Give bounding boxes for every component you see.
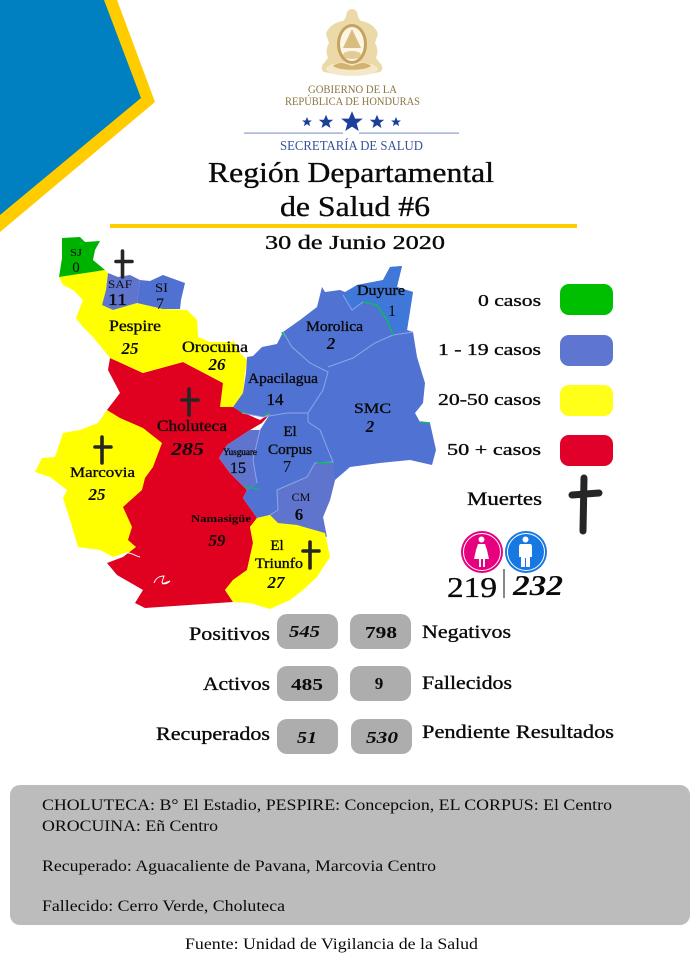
title [208, 158, 494, 223]
map labels: 1 [388, 303, 396, 320]
map labels: Choluteca [157, 418, 227, 435]
map labels: Corpus [268, 442, 312, 458]
legend [438, 284, 613, 531]
icon: five stars [302, 111, 401, 131]
stat: Recuperados [156, 719, 338, 754]
region: Pespire and Orocuina [59, 270, 247, 407]
legend item: 1-19 casos [438, 335, 613, 366]
stat: Negativos: 798 [365, 623, 397, 642]
women count: 219 [447, 572, 497, 604]
region: Marcovia [35, 410, 175, 557]
stat: Pendiente Resultados [351, 719, 614, 754]
title: de Salud #6 [280, 192, 430, 223]
icon: man [505, 531, 547, 573]
panel: case locations: Fallecido: Cerro Verde, Choluteca [42, 898, 285, 915]
stat: Fallecidos: 9 [375, 674, 383, 693]
icon: woman [461, 531, 503, 573]
legend item: Muertes: Muertes [467, 489, 542, 510]
region: Concepción de María [270, 462, 335, 532]
map labels: Duyure [357, 283, 405, 299]
stat: Negativos [350, 614, 511, 649]
map labels: Morolica [306, 319, 363, 335]
stat: Pendiente Resultados: Pendiente Resultados [422, 722, 614, 743]
stat: Negativos: Negativos [422, 622, 511, 643]
panel: case locations: OROCUINA: Eñ Centro [42, 818, 218, 835]
date: 30 de Junio 2020 [265, 232, 445, 254]
map labels: Orocuina [182, 339, 248, 356]
map labels: El [270, 538, 284, 554]
gender counts [447, 531, 563, 604]
map labels: SJ [70, 247, 83, 259]
region: eastern municipalities [233, 266, 436, 537]
title: Región Departamental [208, 158, 494, 189]
map labels: Yusguare [223, 447, 257, 457]
map labels: 2 [326, 334, 336, 353]
statistics [156, 614, 614, 754]
map labels: 7 [156, 296, 164, 313]
region: San Isidro [137, 275, 185, 309]
region: Duyure [343, 266, 413, 335]
map labels: 0 [72, 260, 80, 276]
logo: government of Honduras [244, 9, 459, 153]
stat: Activos: 485 [291, 675, 323, 694]
legend item: 1-19 casos: 1 - 19 casos [438, 340, 541, 359]
region: Choluteca and Namasigüe [107, 358, 270, 608]
map labels: CM [292, 490, 311, 504]
map labels: SMC [354, 401, 391, 417]
stat: Activos [203, 666, 338, 701]
panel: case locations: Recuperado: Aguacaliente de Pavana, Marcovia Centro [42, 858, 436, 875]
text: Gobierno de la República de Honduras: GOBIERNO DE LA [308, 84, 398, 96]
stat: Recuperados: 51 [297, 728, 317, 747]
icon: coat of arms [322, 9, 382, 76]
map labels: 15 [230, 460, 246, 477]
text: Secretaría de Salud: SECRETARÍA DE SALUD [280, 138, 423, 153]
corner decoration [0, 0, 155, 232]
map labels: 11 [108, 290, 127, 309]
stat: Fallecidos [350, 666, 512, 701]
map: department regions [35, 237, 436, 609]
legend item: 50+ casos: 50 + casos [447, 440, 541, 459]
map labels: 26 [208, 355, 226, 374]
map labels: Triunfo [255, 556, 303, 572]
region: El Triunfo [225, 515, 330, 609]
map labels: SAF [108, 277, 132, 291]
stat: Positivos: 545 [289, 622, 321, 641]
legend item: 20-50 casos [438, 385, 613, 416]
men count: 232 [512, 570, 563, 602]
source: Fuente: Unidad de Vigilancia de la Salud [185, 936, 478, 953]
stat: Activos: Activos [203, 674, 270, 695]
legend item: 50+ casos [447, 435, 613, 466]
map labels: 285 [170, 439, 204, 459]
region: Yusguare [219, 430, 260, 490]
map labels: 27 [266, 573, 286, 592]
map labels: Namasigüe [191, 513, 251, 525]
map labels: 6 [295, 505, 303, 524]
text: Gobierno de la República de Honduras [285, 84, 420, 108]
map labels: 14 [266, 390, 284, 409]
map labels: SI [155, 280, 168, 295]
map labels: 7 [283, 457, 292, 476]
map labels: Apacilagua [248, 371, 318, 387]
region: San José [59, 237, 105, 277]
stat: Positivos [189, 614, 338, 649]
region: San Antonio de Flores [102, 273, 140, 310]
panel: case locations [10, 785, 690, 925]
legend item: 20-50 casos: 20-50 casos [438, 390, 541, 409]
map labels: 25 [88, 485, 106, 504]
text: Gobierno de la República de Honduras: REPÚBLICA DE HONDURAS [285, 94, 420, 108]
stat: Recuperados: Recuperados [156, 724, 270, 745]
map labels [70, 247, 405, 592]
map labels: Pespire [109, 318, 161, 335]
stat: Fallecidos: Fallecidos [422, 673, 512, 694]
stat: Positivos: Positivos [189, 624, 270, 645]
map labels: 59 [208, 531, 226, 550]
map labels: Marcovia [70, 465, 135, 481]
map labels: 25 [120, 339, 139, 358]
legend item: 0 casos [478, 284, 613, 315]
stat: Pendiente Resultados: 530 [366, 728, 399, 747]
panel: case locations: CHOLUTECA: B° El Estadio, PESPIRE: Concepcion, EL CORPUS: El Centro [42, 797, 612, 814]
map labels: El [283, 424, 297, 440]
legend item: 0 casos: 0 casos [478, 291, 541, 310]
map labels: 2 [365, 417, 375, 436]
legend item: Muertes [467, 478, 599, 531]
icon: death crosses on map [95, 251, 319, 568]
